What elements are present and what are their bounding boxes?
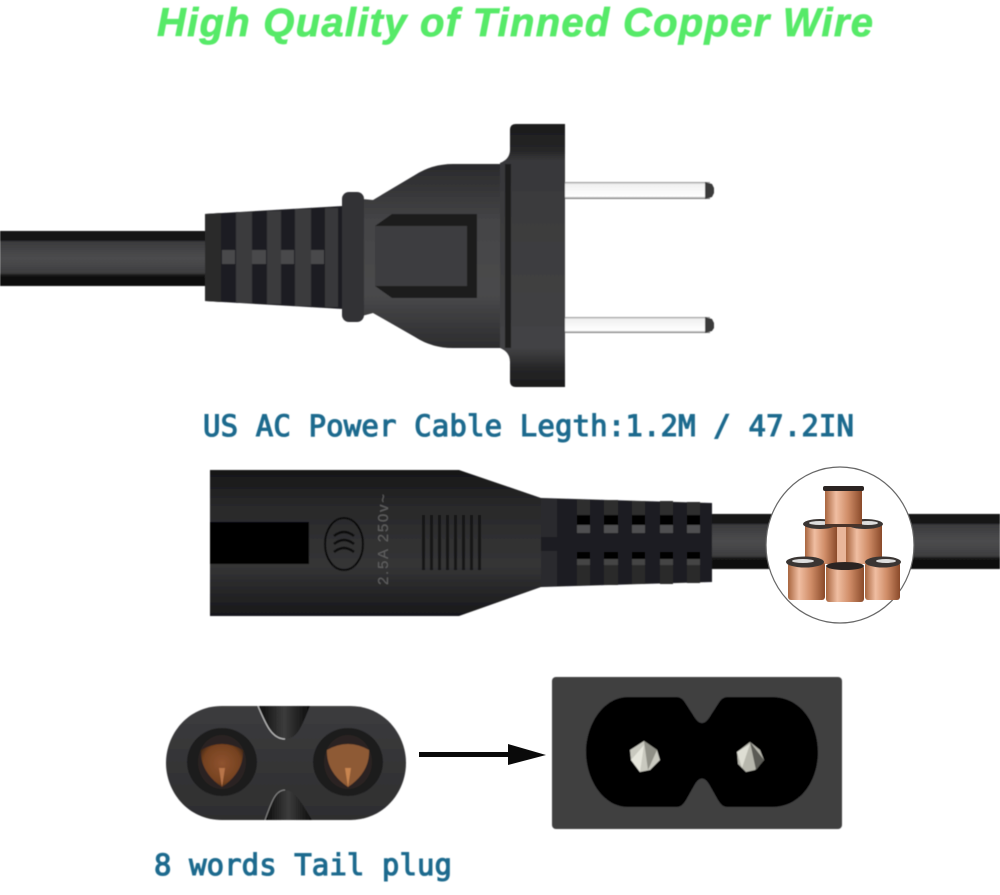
connector body	[210, 470, 541, 616]
figure-8 connector	[210, 470, 1000, 616]
safety mark	[325, 518, 363, 570]
spool: top	[823, 486, 864, 527]
spool: middle left	[803, 519, 837, 564]
flange	[500, 124, 565, 387]
flat cable	[0, 231, 207, 286]
left contact	[187, 728, 257, 796]
right pin	[737, 742, 764, 772]
rating text: 2.5A 250v~	[375, 494, 392, 585]
spool: bottom centre	[826, 562, 864, 602]
spool: bottom left	[786, 556, 825, 600]
left pin	[630, 741, 660, 772]
copper spools callout	[766, 467, 914, 623]
flat cable	[705, 514, 1000, 569]
right contact	[313, 728, 383, 796]
main plug body	[362, 164, 506, 348]
title: High Quality of Tinned Copper Wire	[157, 1, 873, 45]
pin: lower	[564, 317, 714, 333]
US power plug	[0, 124, 714, 387]
top notch	[258, 706, 310, 739]
socket slot	[210, 522, 309, 564]
inlet socket	[552, 677, 842, 829]
collar	[342, 192, 364, 322]
cable length label: US AC Power Cable Legth:1.2M / 47.2IN	[203, 409, 854, 443]
socket opening	[586, 697, 818, 807]
bottom notch	[265, 790, 312, 820]
plug end view	[166, 706, 406, 820]
ribbed grip	[422, 515, 481, 570]
strain relief	[541, 498, 712, 587]
strain relief	[205, 206, 343, 309]
pin: upper	[564, 182, 714, 199]
spool: bottom right	[865, 556, 901, 600]
spool: middle right	[846, 519, 883, 564]
arrow	[419, 744, 546, 765]
tail plug label: 8 words Tail plug	[154, 848, 452, 882]
